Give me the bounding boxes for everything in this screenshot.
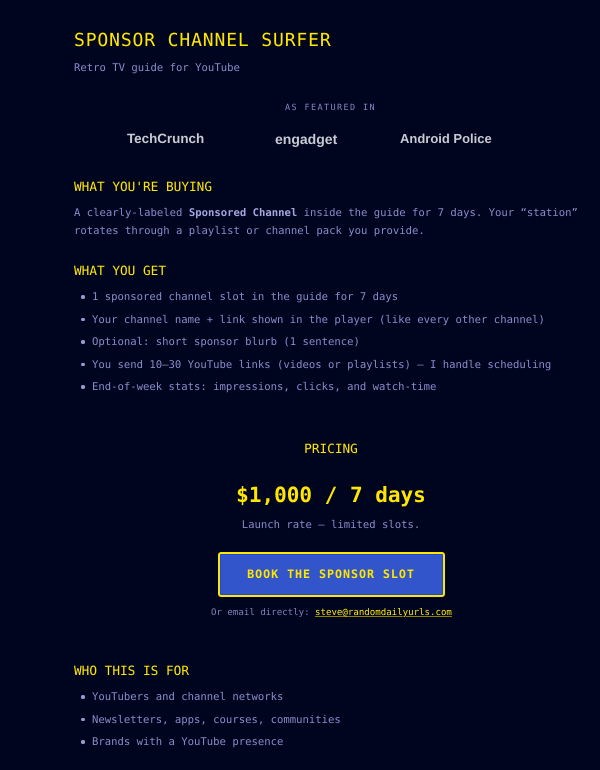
heading: pricing: PRICING [304, 442, 358, 457]
list: who this is for [81, 691, 341, 748]
paragraph: what you're buying: A clearly-labeled Sponsored Channel inside the guide for 7 days. Your “station” [74, 207, 578, 219]
list: who this is for: YouTubers and channel networks [92, 691, 283, 703]
paragraph: what you're buying [74, 207, 578, 237]
logo: Android Police: Android Police [400, 130, 492, 146]
heading: what you get: WHAT YOU GET [74, 264, 166, 279]
as featured in label: AS FEATURED IN [285, 103, 376, 113]
logo: TechCrunch: TechCrunch [127, 130, 204, 146]
list: who this is for: Newsletters, apps, courses, communities [92, 714, 341, 726]
subtitle: Retro TV guide for YouTube [74, 62, 240, 74]
pricing note: Launch rate — limited slots. [242, 519, 420, 531]
email line: Or email directly: steve@randomdailyurls.com [211, 608, 452, 618]
list: what you get: You send 10–30 YouTube links (videos or playlists) — I handle scheduling [92, 359, 551, 371]
price: $1,000 / 7 days [236, 483, 426, 507]
button: book the sponsor slot: BOOK THE SPONSOR SLOT [247, 567, 415, 581]
heading: who this is for: WHO THIS IS FOR [74, 664, 189, 679]
list: what you get [81, 291, 551, 393]
press logos [127, 130, 492, 147]
list: who this is for: Brands with a YouTube presence [92, 736, 283, 748]
list: what you get: Your channel name + link shown in the player (like every other channel) [92, 314, 545, 326]
list: what you get: 1 sponsored channel slot in the guide for 7 days [92, 291, 398, 303]
title: SPONSOR CHANNEL SURFER [74, 30, 332, 51]
paragraph: what you're buying: rotates through a playlist or channel pack you provide. [74, 225, 425, 237]
list: what you get: Optional: short sponsor blurb (1 sentence) [92, 336, 360, 348]
heading: what you're buying: WHAT YOU'RE BUYING [74, 180, 212, 195]
list: what you get: End-of-week stats: impressions, clicks, and watch-time [92, 381, 436, 393]
button: book the sponsor slot [218, 552, 445, 597]
logo: engadget: engadget [275, 130, 337, 146]
